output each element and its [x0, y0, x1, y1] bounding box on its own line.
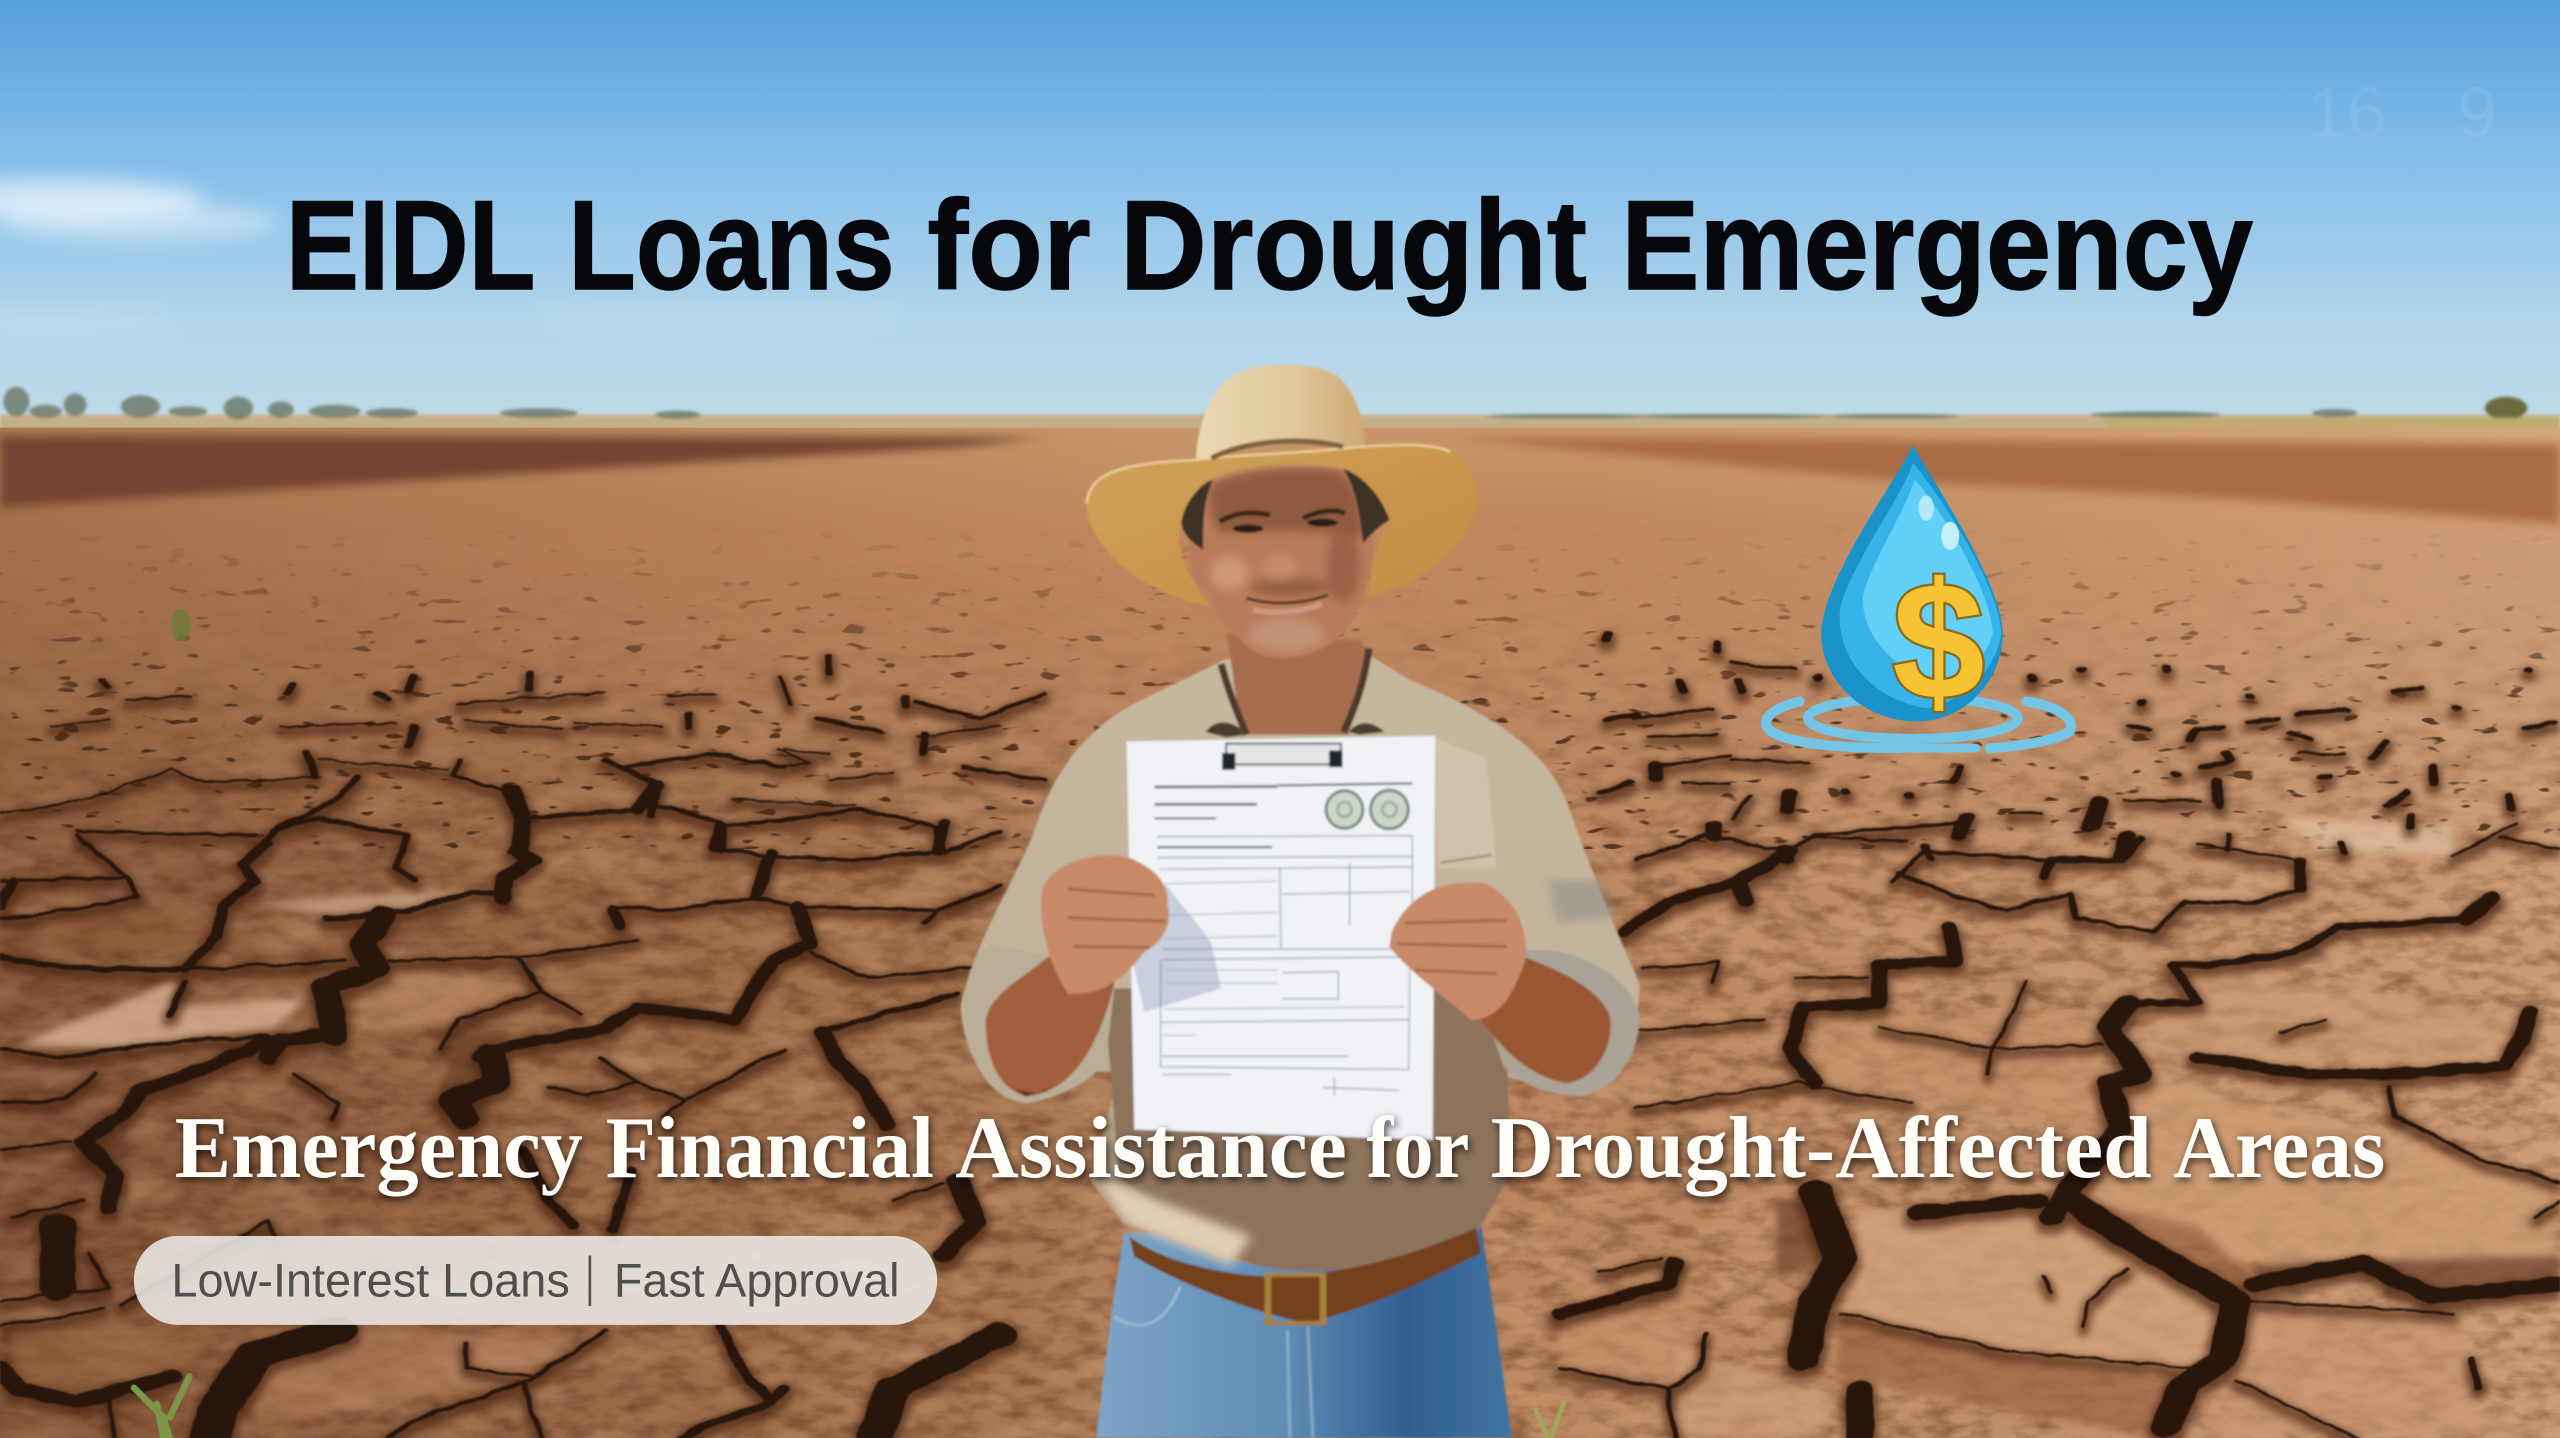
belt and buckle: [1129, 1228, 1481, 1323]
crack network: [0, 633, 2560, 1438]
title: Emergency: [1621, 174, 2253, 316]
form lines: [1155, 783, 1412, 1096]
watermark: 16 9: 16: [2307, 73, 2387, 153]
left sleeve cuff and forearm: [964, 943, 1120, 1103]
right sleeve cuff and forearm: [1472, 880, 1640, 1097]
paper form on clipboard: [1127, 736, 1435, 1140]
icon: water drop with dollar sign: [1766, 445, 2071, 748]
sky background: [0, 0, 2560, 428]
face shading: [1209, 469, 1363, 651]
title: EIDL: [286, 174, 536, 316]
cracked ground base: [0, 428, 2560, 1438]
droplet body: [1821, 445, 2003, 721]
watermark: 16 9: [2307, 73, 2497, 153]
ripple rings: [1766, 697, 2071, 748]
title: [286, 174, 2253, 316]
upper left cracks: [0, 657, 1000, 853]
jeans: [1096, 1227, 1512, 1438]
lit soil plates: [13, 818, 2560, 1438]
shirt and torso: [961, 648, 1639, 1270]
right hand: [1389, 883, 1526, 1020]
pill badge: Low-Interest Loans: [171, 1254, 570, 1307]
mid-left and centre crack gashes: [620, 661, 1796, 780]
seals: [1326, 790, 1408, 829]
face: [1180, 467, 1390, 658]
horizon tree line: [0, 387, 2560, 438]
clip: [1222, 744, 1342, 770]
hat crown: [1196, 365, 1366, 463]
title: Drought: [1120, 174, 1587, 316]
subtitle: for: [1367, 1099, 1469, 1197]
subtitle: Areas: [2173, 1099, 2385, 1197]
farmer holding form: [961, 365, 1640, 1438]
title: Loans: [568, 174, 895, 316]
soil mottling: [0, 638, 2560, 1438]
right foreground cracks: [1560, 780, 2560, 1438]
grass tufts: [134, 609, 1564, 1438]
subtitle: [175, 1099, 2385, 1197]
hat brim: [1087, 441, 1478, 606]
title: for: [927, 174, 1091, 316]
subtitle: Assistance: [955, 1099, 1347, 1197]
subtitle: Drought-Affected: [1491, 1099, 2152, 1197]
subtitle: Financial: [606, 1099, 934, 1197]
distant dark furrow bands: [0, 436, 2560, 524]
neck: [1221, 633, 1372, 735]
watermark: 16 9: 9: [2457, 73, 2497, 153]
subtitle: Emergency: [175, 1099, 583, 1197]
dollar sign: $: [1892, 548, 1985, 734]
left hand: [1041, 855, 1169, 994]
pill badge: [134, 1236, 937, 1325]
pill badge: Fast Approval: [614, 1254, 900, 1307]
left foreground cracks: [0, 785, 1000, 1438]
upper right crack gashes: [1600, 633, 2560, 860]
clouds: [0, 180, 914, 336]
distant crack speckle: [0, 536, 2560, 849]
